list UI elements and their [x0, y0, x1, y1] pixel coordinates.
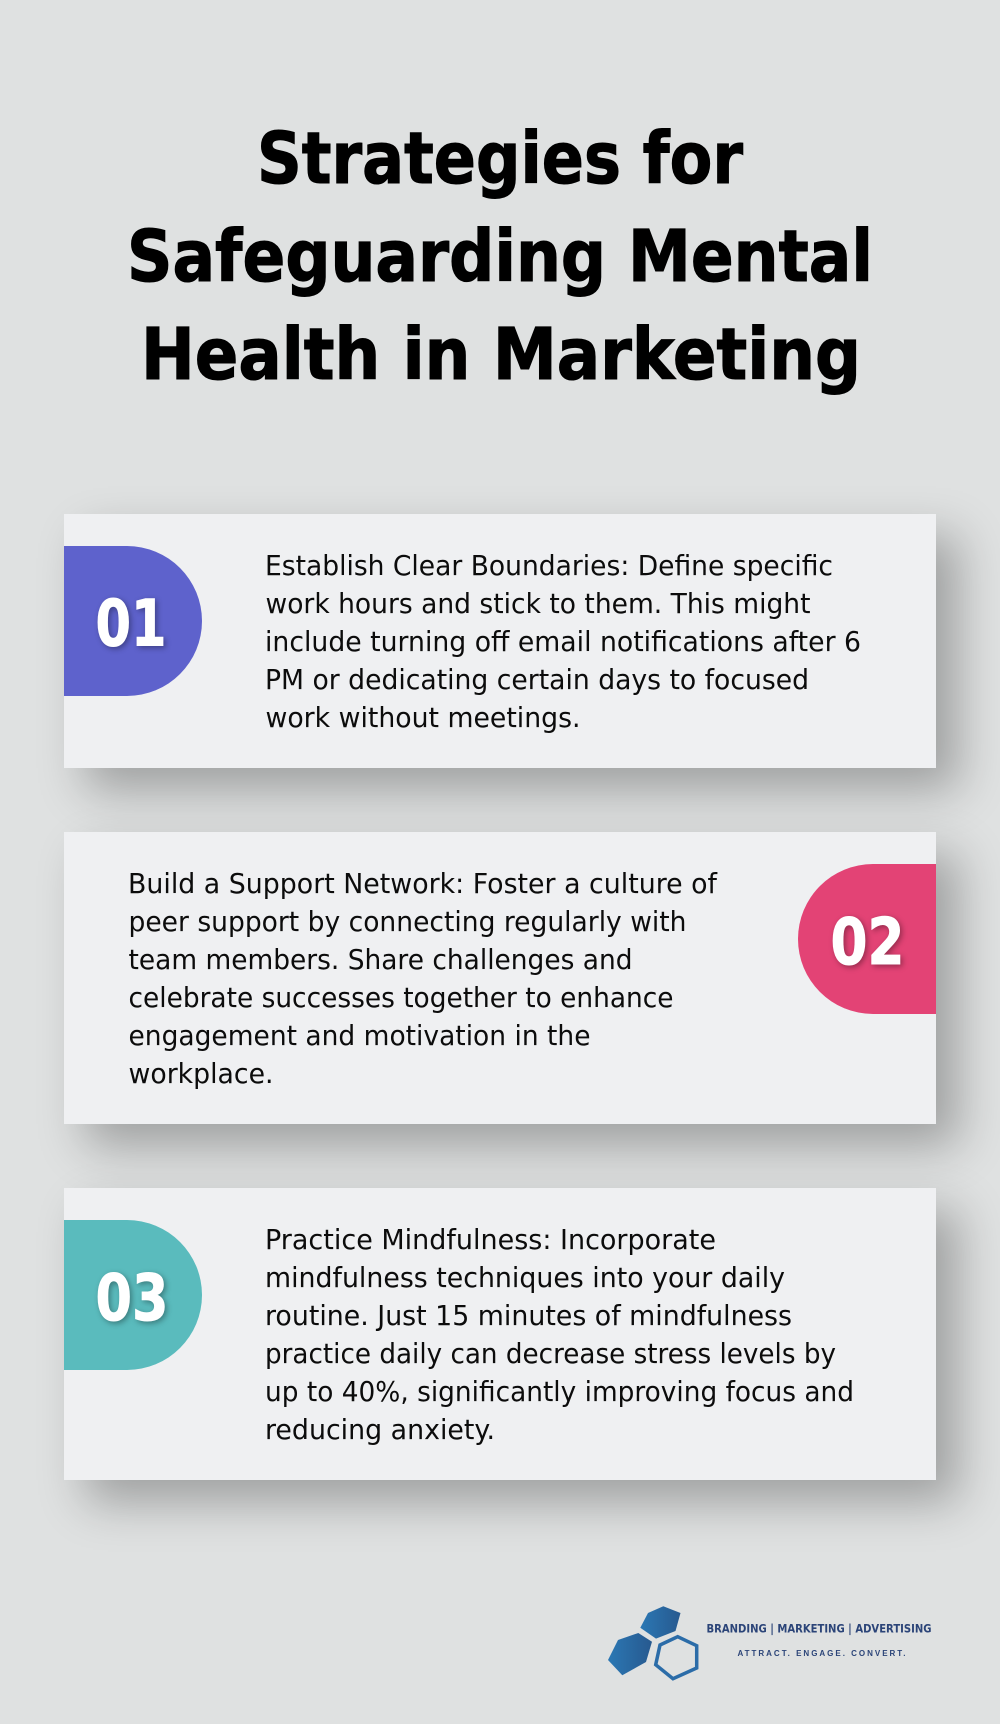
- panel: step 01: [64, 514, 936, 768]
- text block: step 02: workplace.: [128, 1058, 274, 1090]
- text block: step 03: routine. Just 15 minutes of mindfulness: [265, 1300, 792, 1332]
- text block: step 01: include turning off email notifications after 6: [265, 626, 861, 658]
- text block: step 02: peer support by connecting regularly with: [128, 906, 686, 938]
- icon: left hexagon: [608, 1633, 652, 1675]
- text block: step 02: celebrate successes together to enhance: [128, 982, 674, 1014]
- text block: step 01: PM or dedicating certain days to focused: [265, 664, 809, 696]
- icon: outline hexagon: [656, 1637, 697, 1679]
- text block: step 02: [128, 868, 906, 1090]
- text block: step 03: practice daily can decrease stress levels by: [265, 1338, 836, 1370]
- logo text: tagline: ATTRACT. ENGAGE. CONVERT.: [738, 1649, 906, 1658]
- panel: step 02: [64, 832, 936, 1124]
- text block: step 02: Build a Support Network: Foster a culture of: [128, 868, 718, 900]
- text block: step 02: 02: [830, 906, 904, 980]
- badge: 03: [64, 1220, 202, 1370]
- badge: 02: [798, 864, 936, 1014]
- text block: step 02: engagement and motivation in the: [128, 1020, 590, 1052]
- text block: step 01: 01: [96, 588, 166, 662]
- text block: step 01: Establish Clear Boundaries: Define specific: [265, 550, 833, 582]
- title: Safeguarding Mental: [127, 215, 873, 298]
- text block: step 03: reducing anxiety.: [265, 1414, 495, 1446]
- icon: top hexagon: [640, 1606, 680, 1639]
- text block: step 02: team members. Share challenges and: [128, 944, 632, 976]
- text block: step 01: work without meetings.: [266, 702, 580, 734]
- text block: step 03: Practice Mindfulness: Incorporate: [265, 1224, 716, 1256]
- title: [127, 117, 873, 396]
- title: Health in Marketing: [141, 313, 861, 396]
- text block: step 01: [96, 550, 861, 734]
- text block: step 03: [96, 1224, 854, 1446]
- panel: step 03: [64, 1188, 936, 1480]
- text block: step 01: work hours and stick to them. This might: [266, 588, 811, 620]
- logo text: services: BRANDING | MARKETING | ADVERTISING: [706, 1622, 932, 1636]
- title: Strategies for: [257, 117, 743, 200]
- badge: 01: [64, 546, 202, 696]
- logo: [608, 1606, 932, 1681]
- text block: step 03: up to 40%, significantly improving focus and: [265, 1376, 854, 1408]
- text block: step 03: 03: [96, 1262, 168, 1336]
- text block: step 03: mindfulness techniques into your daily: [265, 1262, 785, 1294]
